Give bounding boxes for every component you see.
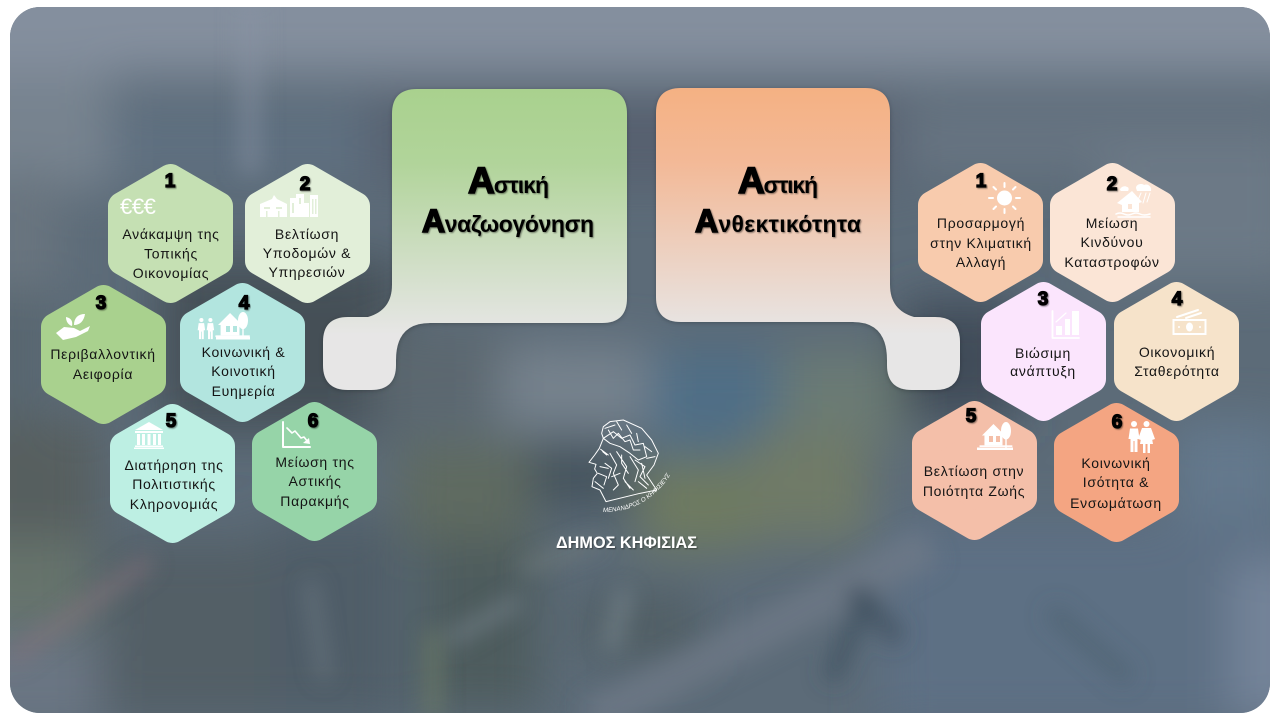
hexagon: Περιβαλλοντική Αειφορία [50,293,156,410]
icon: couple [1128,421,1155,453]
label [1064,215,1160,270]
label: Αστικής [288,473,342,489]
label: Σταθερότητα [1134,363,1220,379]
number 2: 2 [300,174,310,195]
label: Αειφορία [73,366,133,382]
label [263,226,351,280]
label: Ισότητα & [1083,474,1149,490]
icon: euro symbols: €€€ [120,194,156,219]
hexagon: Κοινωνική & Κοινοτική Ευημερία [194,293,291,408]
hexagon: Οικονομική Σταθερότητα [1128,289,1225,407]
label [1070,455,1162,511]
icon: hand with plant [56,314,90,340]
label: Κοινωνική & [202,344,285,360]
logo: Menander head: ΜΕΝΑΝΔΡΟΣ Ο ΚΗΦΙΣΙΕΥΣ [603,472,670,512]
label: Προσαρμογή [937,215,1025,231]
hexagon: Προσαρμογή στην Κλιματική Αλλαγή [930,171,1032,288]
heading: Αστική Ανθεκτικότητα: Αστική [738,160,818,201]
number 5: 5 [166,411,177,432]
label [1010,345,1076,379]
hexagon: Βιώσιμη ανάπτυξη [995,289,1092,407]
label: Μείωση της [275,454,355,470]
heading: Αστική Ανθεκτικότητα [695,160,861,239]
number 6: 6 [308,411,318,432]
icon: growth bar chart [1052,311,1079,338]
label: στην Κλιματική [930,235,1032,251]
label [923,463,1025,499]
icon: banknotes [1174,310,1206,334]
hexagon: Βελτίωση στην Ποιότητα Ζωής [923,406,1025,526]
label: Ευημερία [212,383,275,399]
label: Κληρονομιάς [130,496,218,512]
label: ανάπτυξη [1010,363,1076,379]
number 3: 3 [96,293,106,314]
label [50,346,156,382]
hexagon: Διατήρηση της Πολιτιστικής Κληρονομιάς [124,411,224,529]
number 4: 4 [239,293,250,314]
number 3: 3 [1038,289,1048,310]
icon: house and tree [977,422,1013,450]
number 1: 1 [165,171,176,192]
hexagon: Ανάκαμψη της Τοπικής Οικονομίας [120,171,220,289]
label: Κοινοτική [211,363,276,379]
label [930,215,1032,270]
hexagon: Μείωση της Αστικής Παρακμής [266,411,363,527]
label: Βελτίωση [275,226,339,242]
icon: sun [989,183,1020,213]
icon: classical temple [134,422,164,449]
label [1134,344,1220,379]
label: Βιώσιμη [1015,345,1071,361]
label: Ενσωμάτωση [1070,495,1162,511]
label: Τοπικής [144,246,198,262]
icon: flooded house with clouds [1116,184,1151,217]
label: Πολιτιστικής [132,476,216,492]
label: Υπηρεσιών [269,264,345,280]
label: Διατήρηση της [124,457,224,473]
label: Βελτίωση στην [924,463,1024,479]
label [202,344,285,399]
label: Κινδύνου [1081,234,1143,250]
label: Υποδομών & [263,245,351,261]
icon: declining chart [283,422,310,447]
hexagon: Βελτίωση Υποδομών & Υπηρεσιών [259,174,356,289]
icon: buildings [260,194,318,217]
number 6: 6 [1112,412,1122,433]
hexagon: Κοινωνική Ισότητα & Ενσωμάτωση [1068,412,1165,528]
panel: Αστική Ανθεκτικότητα [656,88,960,390]
number 4: 4 [1172,289,1183,310]
number 1: 1 [976,171,987,192]
heading: Αστική Αναζωογόνηση: Αστική [468,160,549,201]
label: Περιβαλλοντική [50,346,156,362]
label: Παρακμής [280,493,350,509]
label [122,226,220,281]
heading: Αστική Αναζωογόνηση: Αναζωογόνηση [422,203,594,239]
label: Μείωση [1086,215,1138,231]
label [275,454,355,509]
hexagon: Μείωση Κινδύνου Καταστροφών [1064,174,1161,288]
text: ΔΗΜΟΣ ΚΗΦΙΣΙΑΣ: ΔΗΜΟΣ ΚΗΦΙΣΙΑΣ [556,533,697,552]
panel: Αστική Αναζωογόνηση [323,89,627,390]
number 5: 5 [966,406,977,427]
logo: Menander head [588,420,670,512]
label: Καταστροφών [1064,254,1160,270]
label: Ανάκαμψη της [122,226,220,242]
label: Οικονομίας [133,265,209,281]
icon: family and house [198,312,250,340]
label: Κοινωνική [1081,455,1151,471]
heading: Αστική Αναζωογόνηση [422,160,594,239]
label: Οικονομική [1139,344,1215,360]
label: Ποιότητα Ζωής [923,483,1025,499]
heading: Αστική Ανθεκτικότητα: Ανθεκτικότητα [695,203,861,239]
number 2: 2 [1107,174,1117,195]
label: Αλλαγή [956,254,1006,270]
label [124,457,224,512]
